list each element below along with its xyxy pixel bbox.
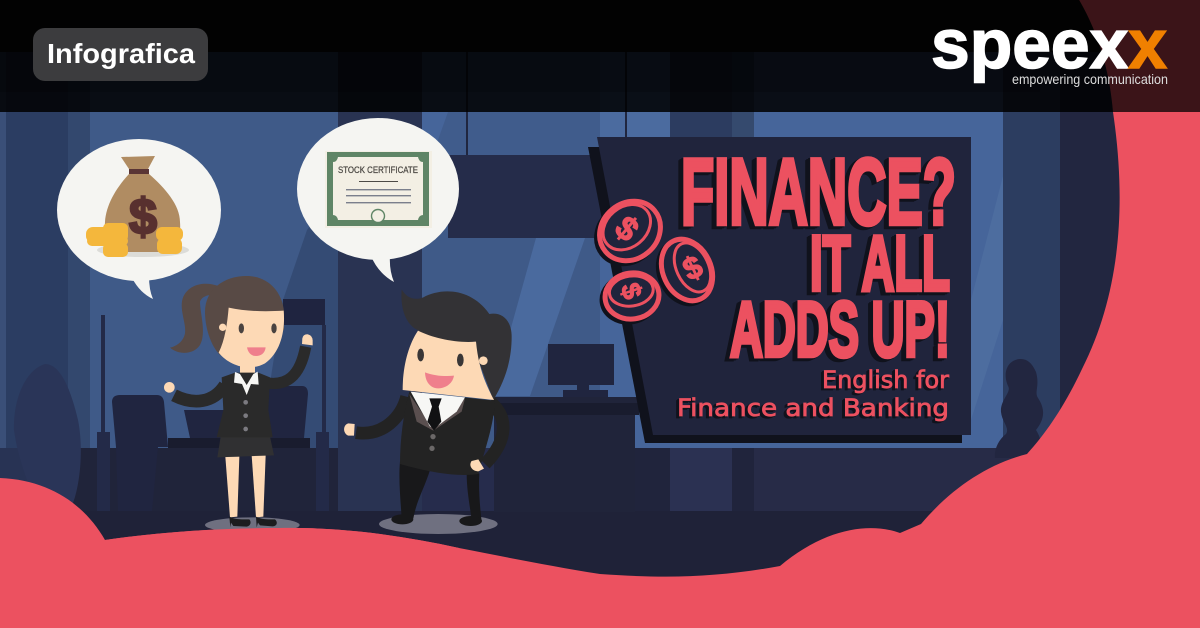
red wave in front of figures	[105, 528, 459, 560]
headline: ADDS UP!	[730, 285, 950, 373]
left chair	[112, 395, 168, 511]
skirt	[217, 437, 274, 457]
logo: speexx: speexx	[931, 5, 1167, 83]
icon: certificate: STOCK CERTIFICATE	[338, 165, 418, 176]
lapels	[409, 394, 465, 431]
icon: coins: $	[608, 208, 646, 248]
desk and monitor	[494, 344, 639, 512]
sign panel	[597, 137, 971, 435]
face	[219, 308, 284, 375]
subtitle	[677, 366, 949, 422]
title sign	[587, 137, 971, 443]
hands	[344, 423, 484, 471]
headline: IT ALL	[810, 219, 950, 307]
icon: coins: $	[677, 248, 708, 287]
speech bubble: stock certificate	[297, 118, 459, 282]
tie	[427, 398, 442, 431]
jacket	[217, 373, 273, 437]
left plant	[14, 364, 81, 510]
back chair	[184, 386, 308, 438]
ponytail and hair	[170, 276, 284, 355]
jacket buttons	[243, 400, 248, 431]
shirt	[411, 392, 465, 427]
legs and shoes	[225, 455, 277, 527]
logo: speexx: empowering communication	[1012, 71, 1168, 87]
headline: FINANCE?	[681, 139, 956, 244]
arms	[174, 347, 306, 401]
subtitle: English for	[822, 366, 949, 394]
collar	[234, 372, 259, 395]
hair	[401, 289, 512, 400]
top dark band	[0, 0, 1200, 112]
floor lamps	[97, 299, 329, 511]
trousers and shoes	[391, 462, 482, 526]
icon: coins: $	[615, 279, 648, 303]
arms	[356, 397, 503, 464]
speech bubble: money bag	[57, 139, 221, 299]
face	[403, 331, 494, 400]
badge: Infografica	[33, 28, 208, 81]
figure: man	[344, 289, 512, 534]
icon: certificate	[325, 151, 432, 228]
right plant	[995, 359, 1043, 458]
meeting table	[168, 438, 310, 511]
jacket buttons	[429, 434, 436, 451]
badge: Infografica: Infografica	[47, 38, 195, 69]
hands	[164, 334, 313, 393]
figure: woman	[164, 276, 313, 533]
hanging box and wire	[448, 52, 627, 238]
icon: money bag: $	[129, 189, 157, 245]
upper scene dimming	[0, 52, 1200, 112]
sign shadow	[588, 147, 962, 443]
icon: money bag	[86, 156, 189, 257]
headline	[681, 139, 956, 373]
lower wall	[0, 448, 1200, 628]
jacket	[400, 392, 495, 475]
icon: coins	[587, 189, 722, 323]
subtitle: Finance and Banking	[677, 394, 949, 422]
